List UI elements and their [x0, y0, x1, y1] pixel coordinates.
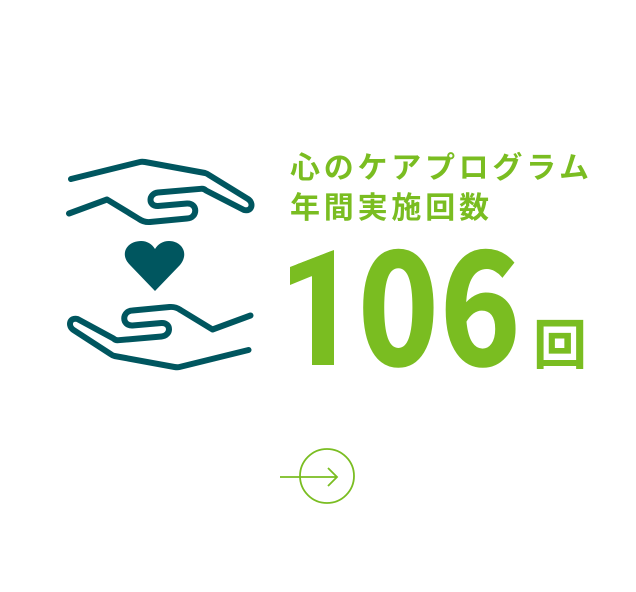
big number	[290, 248, 584, 369]
heading line 1: 心のケアプログラム	[290, 152, 589, 185]
number: 106: 106	[283, 188, 520, 409]
infographic	[66, 152, 588, 504]
unit: 回	[533, 316, 587, 376]
icon: upper hand	[69, 162, 251, 222]
heading line 2: 年間実施回数	[290, 192, 489, 225]
icon: heart	[125, 241, 184, 291]
arrow button	[280, 449, 354, 503]
icon: hands holding heart	[69, 162, 251, 367]
heading	[290, 152, 589, 225]
arrow	[280, 468, 337, 486]
circle	[300, 449, 354, 503]
icon: lower hand	[70, 307, 250, 367]
